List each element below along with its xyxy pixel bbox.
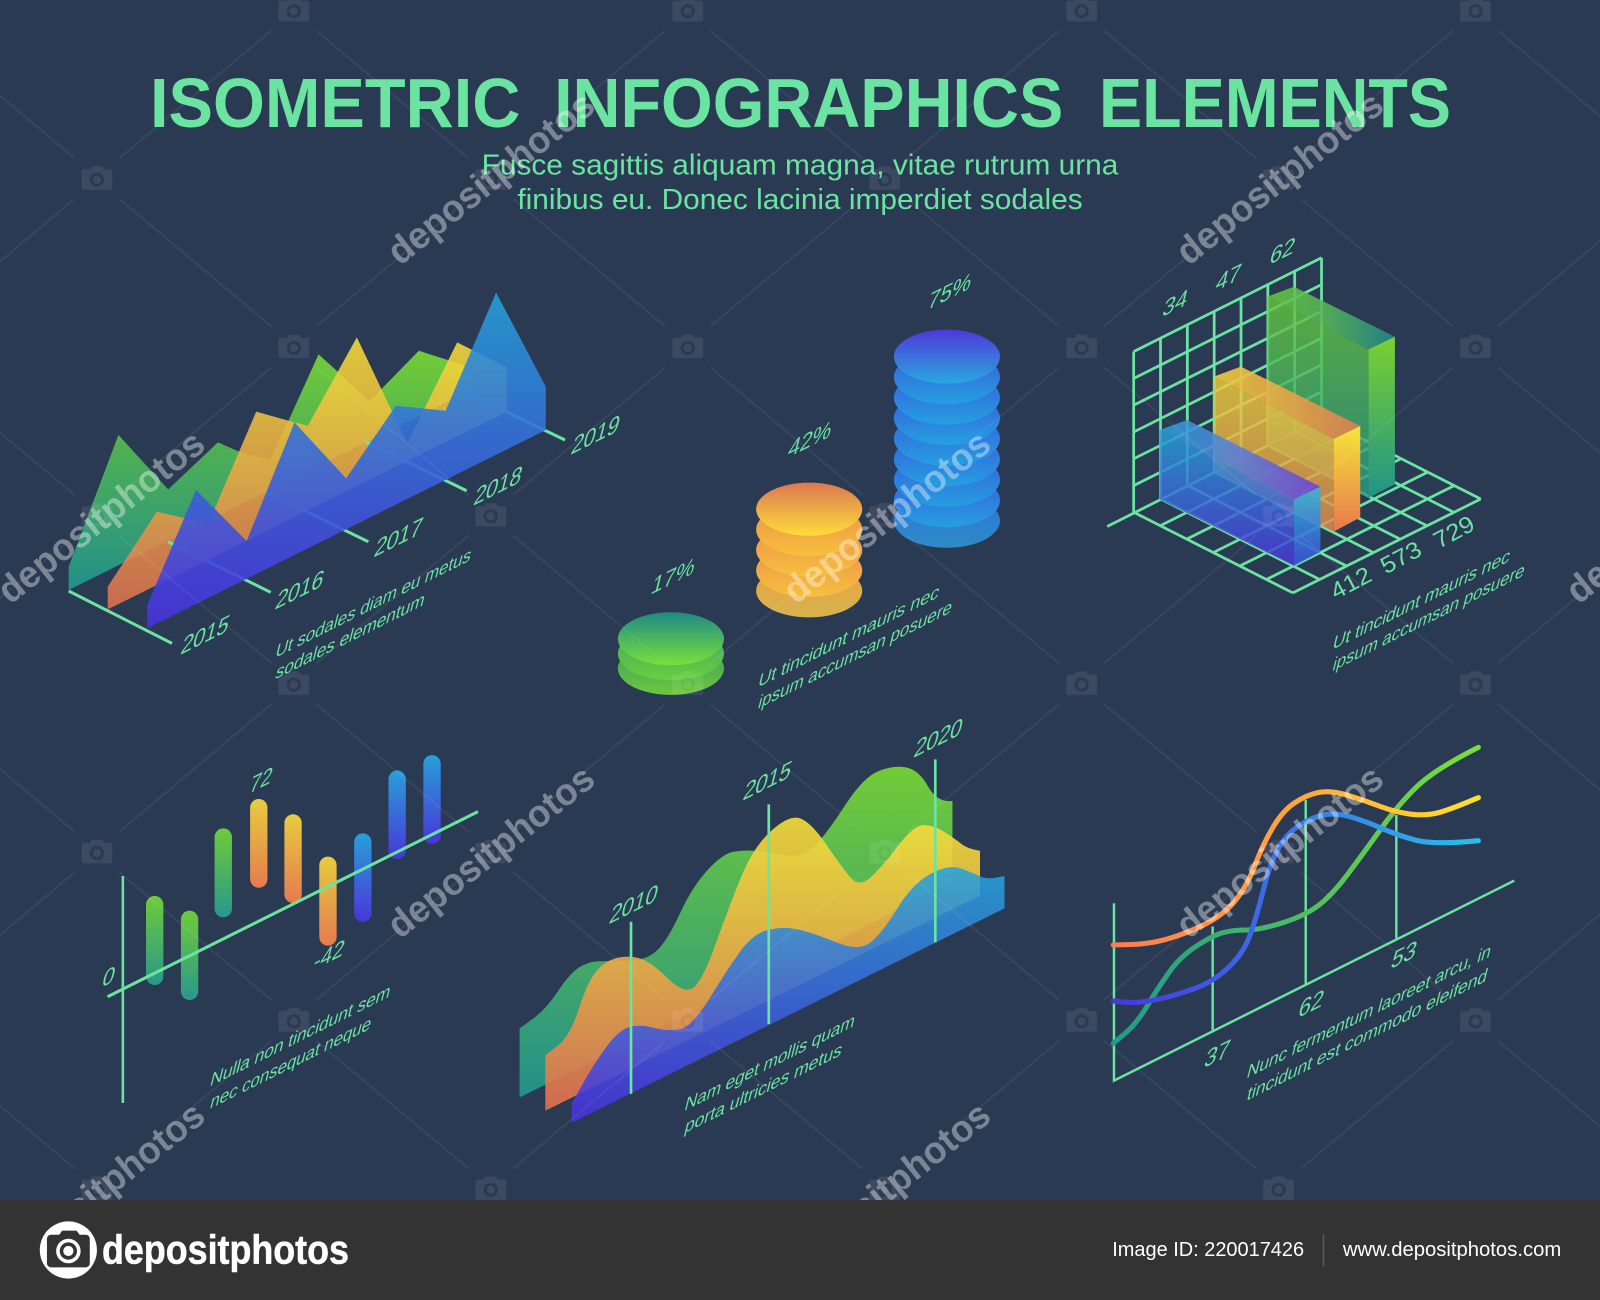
- bar: yellow: [1214, 367, 1360, 532]
- disc stack 17%: [618, 612, 724, 695]
- percent labels: 17%: [649, 552, 698, 601]
- area layer: yellow-orange: [108, 337, 507, 609]
- line: orange to yellow: [1113, 792, 1478, 945]
- area layer: green: [69, 351, 472, 590]
- website url: www.depositphotos.com: [1342, 1239, 1561, 1261]
- caption: Nam eget mollis quam: [682, 1010, 858, 1116]
- panel: stacked disc columns: [618, 267, 1000, 714]
- wall axis labels: [1160, 231, 1298, 323]
- wave layer: green: [520, 767, 952, 1097]
- caption: Ut tincidunt mauris nec: [1330, 545, 1513, 655]
- percent labels: 42%: [785, 415, 835, 464]
- wave layer: yellow-orange: [545, 818, 980, 1111]
- caption: Ut sodales diam eu metus: [273, 544, 474, 663]
- caption: Ut tincidunt mauris nec: [756, 581, 942, 693]
- caption: nec consequat neque: [208, 1012, 374, 1114]
- year tick lines: [69, 390, 565, 643]
- value labels: 72: [247, 761, 276, 800]
- footer bar: [0, 1200, 1600, 1300]
- panel: floating pill bar chart: [100, 755, 478, 1114]
- watermark text: depositphotos: [379, 83, 602, 273]
- value labels: -42: [311, 934, 348, 976]
- percent labels: 75%: [925, 267, 975, 316]
- grid wall and floor: [1107, 258, 1481, 593]
- floor axis labels: [1326, 510, 1479, 604]
- floor axis labels: 729: [1429, 510, 1479, 553]
- year labels: 2016: [273, 565, 327, 616]
- subtitle: finibus eu. Donec lacinia imperdiet sodales: [517, 184, 1083, 216]
- zero baseline: [108, 812, 478, 997]
- value labels: 0: [100, 960, 118, 994]
- year labels: 2015: [178, 610, 232, 661]
- line: teal to green: [1113, 747, 1478, 1043]
- caption: ipsum accumsan posuere: [756, 596, 955, 714]
- title: ELEMENTS: [1099, 64, 1451, 142]
- area layer: blue: [147, 293, 546, 628]
- watermark text: depositphotos: [775, 1093, 998, 1283]
- line: indigo to cyan: [1113, 814, 1478, 1002]
- icon: camera logo: [40, 1221, 97, 1279]
- axes and guide lines: [1114, 800, 1514, 1081]
- value labels: [100, 761, 348, 994]
- value labels: 62: [1295, 984, 1327, 1024]
- year labels: 2010: [607, 879, 661, 930]
- caption: tincidunt est commodo eleifend: [1245, 964, 1490, 1106]
- title: [150, 64, 1451, 142]
- logo wordmark: depositphotos: [102, 1226, 349, 1272]
- panel: 3D bar chart: [1107, 231, 1527, 676]
- year marker lines: [631, 759, 935, 1094]
- value labels: [1202, 935, 1420, 1074]
- subtitle: [482, 149, 1118, 216]
- floor axis labels: 573: [1376, 536, 1426, 579]
- wall axis labels: 62: [1267, 231, 1298, 271]
- watermark text: depositphotos: [1168, 756, 1391, 946]
- year labels: [178, 410, 623, 661]
- disc stack 42%: [756, 483, 862, 617]
- disc stack 75%: [894, 330, 1000, 548]
- year labels: 2015: [740, 756, 795, 807]
- title: ISOMETRIC: [150, 64, 520, 142]
- caption: porta ultricies metus: [682, 1038, 845, 1139]
- vertical axis: [122, 876, 124, 1103]
- wall axis labels: 47: [1213, 258, 1244, 298]
- panel: layered area chart 2015-2019: [69, 293, 623, 685]
- title: INFOGRAPHICS: [554, 64, 1063, 142]
- image id: Image ID: 220017426: [1112, 1239, 1304, 1261]
- year labels: 2017: [371, 512, 426, 564]
- bar: green: [1267, 287, 1395, 498]
- caption: ipsum accumsan posuere: [1330, 559, 1527, 676]
- pill bars: [146, 755, 441, 1000]
- watermark text: depositphotos: [775, 422, 998, 611]
- percent labels: [649, 267, 975, 601]
- year labels: 2020: [911, 713, 966, 764]
- panel: smooth area chart 2010-2020: [520, 713, 1004, 1139]
- caption: Nunc fermentum laoreet arcu, in: [1245, 940, 1494, 1083]
- bar: blue: [1160, 420, 1320, 566]
- watermark text: depositphotos: [1168, 83, 1391, 273]
- caption: sodales elementum: [273, 588, 427, 685]
- floor axis labels: 412: [1326, 561, 1376, 604]
- subtitle: Fusce sagittis aliquam magna, vitae rutrum urna: [482, 149, 1118, 181]
- watermark text: depositphotos: [379, 756, 602, 946]
- wall axis labels: 34: [1160, 283, 1191, 323]
- year labels: 2019: [569, 410, 623, 461]
- panel: multi-line chart: [1113, 747, 1514, 1106]
- year labels: [607, 713, 966, 930]
- caption: Nulla non tincidunt sem: [208, 980, 393, 1092]
- value labels: 37: [1202, 1034, 1233, 1074]
- wave layer: blue: [572, 867, 1004, 1123]
- year labels: 2018: [471, 461, 525, 512]
- value labels: 53: [1388, 935, 1420, 975]
